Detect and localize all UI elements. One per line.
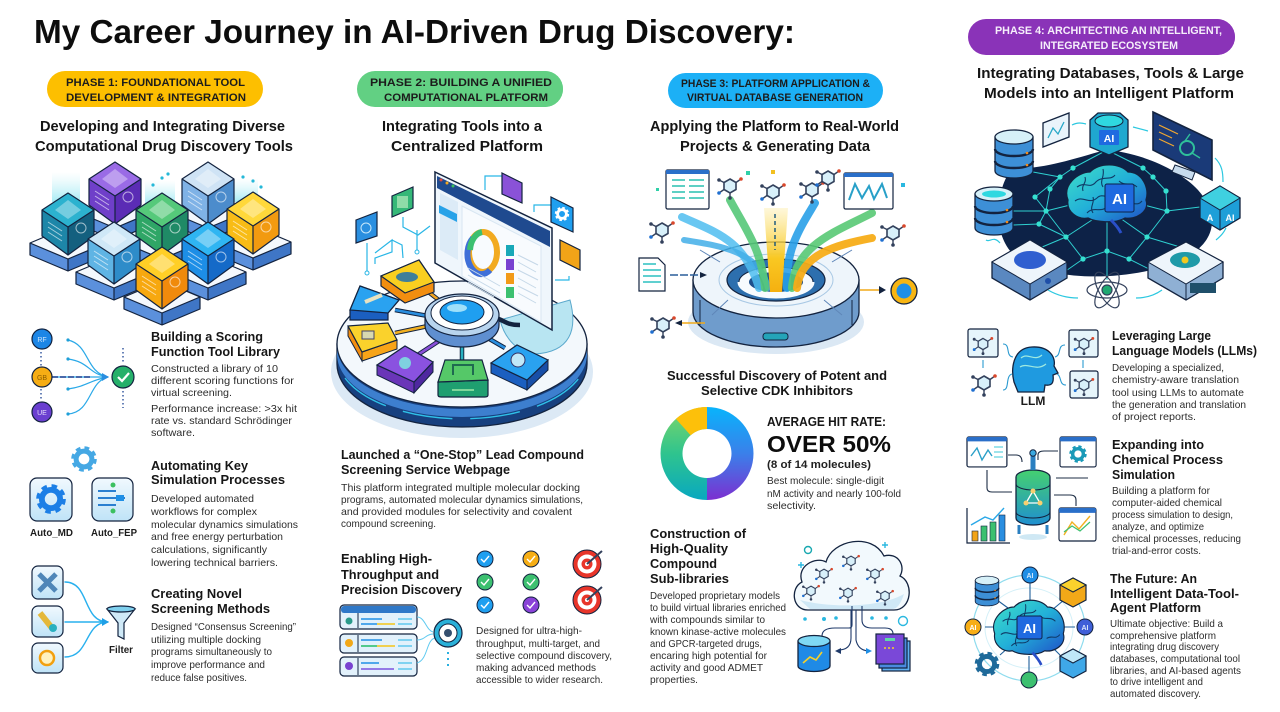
text: data-tool-agent platform: to drive intelligent and xyxy=(1110,677,1203,688)
phase 4 heading xyxy=(977,66,1244,102)
illustration: data funnel platform xyxy=(639,169,917,354)
text: average hit rate: OVER 50% xyxy=(767,431,891,457)
phase 3 heading: Applying the Platform to Real-World xyxy=(650,119,899,135)
phase 2 pill: PHASE 2: BUILDING A UNIFIED xyxy=(370,77,552,89)
text: data-tool-agent platform: automated discovery. xyxy=(1110,689,1201,700)
heading: CDK inhibitors: Successful Discovery of Potent and xyxy=(667,368,887,383)
text: chemical process simulation: analyze, and optimize xyxy=(1112,522,1204,533)
text: one-stop screening webpage: and provided modules for selectivity and covalent xyxy=(341,507,572,518)
icon: docking tiles into filter: Filter xyxy=(109,644,133,656)
text: automating simulations: Automating Key xyxy=(151,458,249,473)
text: compound sub-libraries: with compounds similar to xyxy=(649,615,765,626)
block: novel screening methods xyxy=(32,566,296,684)
text: scoring function library: software. xyxy=(151,428,195,439)
phase 1 pill: PHASE 1: FOUNDATIONAL TOOL xyxy=(66,77,245,89)
text: scoring function library: Constructed a library of 10 xyxy=(151,364,278,375)
heading: CDK inhibitors: Selective CDK Inhibitors xyxy=(701,383,853,398)
text: high-throughput body: making advanced methods xyxy=(476,663,596,674)
icon: docking tiles into filter xyxy=(32,566,135,673)
phase 2 pill: COMPUTATIONAL PLATFORM xyxy=(384,92,548,104)
text: compound sub-libraries: activity and good ADMET xyxy=(650,663,763,674)
donut chart: hit rate xyxy=(660,407,753,500)
text: novel screening methods xyxy=(151,586,296,684)
phase 2 heading: Integrating Tools into a xyxy=(382,119,543,135)
panel: phase 2 xyxy=(331,71,612,686)
illustration: isometric tool cubes xyxy=(30,162,291,325)
text: compound sub-libraries: Developed proprietary models xyxy=(650,591,780,602)
text: compound sub-libraries: known kinase-active molecules xyxy=(650,627,786,638)
text: data-tool-agent platform xyxy=(1110,571,1241,700)
icon: molecule cloud to database xyxy=(794,541,910,672)
text: scoring function library: Performance increase: >3x hit xyxy=(151,404,297,415)
AI brain xyxy=(1067,165,1147,233)
text: high-throughput body: accessible to wider research. xyxy=(476,675,603,686)
block: high-throughput discovery xyxy=(340,550,612,686)
phase 2 heading: Centralized Platform xyxy=(391,139,543,155)
text: automating simulations: Developed automated xyxy=(151,494,254,505)
AI cube xyxy=(1200,186,1240,230)
text: one-stop screening webpage: compound screening. xyxy=(341,519,436,530)
text: high-throughput body xyxy=(476,626,612,686)
network xyxy=(1013,150,1200,280)
phase 1 heading: Developing and Integrating Diverse xyxy=(40,119,285,135)
phase 4 pill: INTEGRATED ECOSYSTEM xyxy=(1040,40,1178,52)
text: average hit rate: nM activity and nearly 100-fold xyxy=(767,489,901,500)
text: scoring function library: rate vs. standard Schrödinger xyxy=(151,416,293,427)
modules xyxy=(348,260,548,397)
text: chemical process simulation: Building a platform for xyxy=(1112,486,1211,497)
text: LLMs: Leveraging Large xyxy=(1112,328,1211,343)
text: chemical process simulation: Expanding into xyxy=(1112,437,1204,452)
text: data-tool-agent platform: comprehensive platform xyxy=(1110,631,1216,642)
block: data-tool-agent platform xyxy=(965,567,1241,700)
text: LLMs: Developing a specialized, xyxy=(1112,363,1224,374)
icon: AI brain hub: AI xyxy=(1023,621,1036,636)
AI brain: AI xyxy=(1112,191,1127,208)
text: automating simulations: molecular dynamics simulations xyxy=(151,520,298,531)
text: data-tool-agent platform: Intelligent Data-Tool- xyxy=(1110,586,1239,601)
text: scoring function library: different scoring functions for xyxy=(151,376,295,387)
block: compound sub-libraries xyxy=(649,526,910,686)
phase 4 heading: Models into an Intelligent Platform xyxy=(984,86,1234,102)
text: novel screening methods: utilizing multiple docking xyxy=(151,635,261,646)
text: average hit rate: Best molecule: single-digit xyxy=(767,476,884,487)
phase 1 pill: DEVELOPMENT & INTEGRATION xyxy=(66,92,246,104)
illustration: intelligent network platform xyxy=(975,112,1240,311)
icon: gear and auto tiles: Auto_FEP xyxy=(91,527,137,539)
text: scoring function library: Building a Scoring xyxy=(151,329,263,344)
icon: scoring function flow: RF xyxy=(37,337,47,344)
text: novel screening methods: Screening Methods xyxy=(151,601,270,616)
AI cylinder: AI xyxy=(1104,133,1114,145)
phase 3 pill xyxy=(668,73,883,108)
phase 3 pill: PHASE 3: PLATFORM APPLICATION & xyxy=(681,78,870,90)
icon: scoring function flow: GB xyxy=(37,375,47,382)
icon: LLM head with molecules xyxy=(968,329,1098,408)
icon: AI brain hub: AI xyxy=(970,625,977,632)
text: chemical process simulation xyxy=(1112,437,1241,557)
heading: high-throughput: Enabling High- xyxy=(341,551,432,566)
text: data-tool-agent platform: Agent Platform xyxy=(1110,600,1201,615)
text: average hit rate xyxy=(767,415,901,512)
phase 3 heading: Projects & Generating Data xyxy=(680,139,871,155)
text: automating simulations: calculations, significantly xyxy=(151,545,268,556)
text: compound sub-libraries: Compound xyxy=(650,556,717,571)
monitor xyxy=(435,172,552,330)
phase 3 pill: VIRTUAL DATABASE GENERATION xyxy=(687,92,863,104)
text: compound sub-libraries: encaring high potential for xyxy=(650,651,768,662)
phase 1 heading: Computational Drug Discovery Tools xyxy=(35,139,293,155)
text: compound sub-libraries xyxy=(649,526,786,686)
text: LLMs: the generation and translation xyxy=(1112,400,1246,411)
icon: reactor with charts xyxy=(967,437,1096,543)
text: novel screening methods: Designed “Consensus Screening” xyxy=(151,622,296,633)
text: compound sub-libraries: and GPCR-targeted drugs, xyxy=(650,639,762,650)
text: high-throughput body: selective compound discovery, xyxy=(476,651,612,662)
heading: high-throughput: Precision Discovery xyxy=(341,582,463,597)
text: chemical process simulation: Simulation xyxy=(1112,467,1175,482)
text: compound sub-libraries: High-Quality xyxy=(650,541,729,556)
text: chemical process simulation: Chemical Process xyxy=(1112,452,1223,467)
icon: screening list to target xyxy=(340,605,462,676)
text: one-stop screening webpage: programs, automated molecular dynamics simulations, xyxy=(341,495,583,506)
atom xyxy=(1087,269,1127,311)
server boxes xyxy=(992,240,1223,300)
connectors xyxy=(395,287,520,362)
panel: phase 4 xyxy=(965,19,1257,700)
text: novel screening methods: reduce false positives. xyxy=(151,673,247,684)
chart panel xyxy=(1043,113,1069,147)
text: data-tool-agent platform: libraries, and AI-based agents xyxy=(1110,666,1241,677)
icon: gear and auto tiles xyxy=(30,449,137,539)
floating tool tiles xyxy=(356,173,580,280)
text: scoring function library: Function Tool Library xyxy=(151,344,281,359)
text: one-stop screening webpage: Screening Service Webpage xyxy=(341,462,510,477)
phase 1 heading xyxy=(35,119,293,155)
block: chemical process simulation xyxy=(967,437,1241,557)
text: LLMs xyxy=(1112,328,1257,423)
icon: scoring function flow: UE xyxy=(37,410,47,417)
text: automating simulations: lowering technical barriers. xyxy=(151,558,278,569)
phase 3 heading xyxy=(650,119,899,155)
text: novel screening methods: Creating Novel xyxy=(151,586,242,601)
text: automating simulations: Simulation Processes xyxy=(151,472,285,487)
text: automating simulations xyxy=(150,458,298,569)
heading: high-throughput xyxy=(341,551,463,597)
text: novel screening methods: improve performance and xyxy=(151,660,265,671)
phase 2 heading xyxy=(382,119,543,155)
text: novel screening methods: programs simultaneously to xyxy=(151,647,272,658)
text: automating simulations: and free energy perturbation xyxy=(151,532,283,543)
source windows and molecules xyxy=(639,169,917,339)
text: compound sub-libraries: to build virtual libraries enriched xyxy=(650,603,786,614)
text: compound sub-libraries: Sub-libraries xyxy=(650,571,729,586)
panel: phase 1 xyxy=(30,71,298,684)
heading: high-throughput: Throughput and xyxy=(341,567,439,582)
block: automating simulations xyxy=(30,449,298,569)
title: My Career Journey in AI-Driven Drug Discovery: xyxy=(34,14,795,51)
text: average hit rate: (8 of 14 molecules) xyxy=(767,459,871,471)
phase 4 pill: PHASE 4: ARCHITECTING AN INTELLIGENT, xyxy=(995,25,1222,37)
icon: gear and auto tiles: Auto_MD xyxy=(30,527,73,539)
text: chemical process simulation: trial-and-error costs. xyxy=(1112,546,1201,557)
icon: AI brain hub xyxy=(965,567,1093,688)
text: average hit rate: AVERAGE HIT RATE: xyxy=(767,415,886,429)
phase 4 pill xyxy=(968,19,1235,55)
text: LLMs: tool using LLMs to automate xyxy=(1112,388,1244,399)
text: LLMs: of project reports. xyxy=(1112,412,1196,423)
text: chemical process simulation: process simulation to design, xyxy=(1112,510,1233,521)
text: one-stop screening webpage: Launched a “One-Stop” Lead Compound xyxy=(341,447,584,462)
text: data-tool-agent platform: The Future: An xyxy=(1110,571,1197,586)
text: chemical process simulation: chemical processes, reducing xyxy=(1112,534,1241,545)
icon: AI brain hub: AI xyxy=(1026,573,1034,580)
icon: LLM head with molecules: LLM xyxy=(1021,394,1045,408)
block: LLMs xyxy=(968,328,1257,423)
text: compound sub-libraries: Construction of xyxy=(650,526,747,541)
text: chemical process simulation: computer-aided chemical xyxy=(1112,498,1222,509)
text: one-stop screening webpage xyxy=(341,447,584,530)
databases xyxy=(975,130,1033,235)
icon: check badges and targets xyxy=(477,550,602,614)
text: scoring function library xyxy=(151,329,297,439)
text: compound sub-libraries: properties. xyxy=(650,675,698,686)
text: scoring function library: virtual screening. xyxy=(151,388,232,399)
text: automating simulations: workflows for complex xyxy=(150,507,257,518)
illustration: centralized platform disc xyxy=(331,172,593,438)
text: one-stop screening webpage: This platform integrated multiple molecular docking xyxy=(341,483,580,494)
icon: AI brain hub: AI xyxy=(1082,625,1089,632)
data streams xyxy=(682,200,872,288)
AI cylinder xyxy=(1090,113,1128,155)
phase 1 pill xyxy=(47,71,263,107)
text: data-tool-agent platform: databases, computational tool xyxy=(1110,654,1240,665)
text: data-tool-agent platform: integrating drug discovery xyxy=(1110,642,1220,653)
block: scoring function library xyxy=(32,329,297,439)
code monitor xyxy=(1153,112,1212,180)
text: high-throughput body: throughput, multi-target, and xyxy=(476,639,600,650)
text: average hit rate: selectivity. xyxy=(767,501,816,512)
heading: CDK inhibitors xyxy=(667,368,887,398)
AI cube: A xyxy=(1207,213,1214,223)
text: high-throughput body: Designed for ultra-high- xyxy=(476,626,582,637)
AI cube: AI xyxy=(1226,213,1234,223)
panel: phase 3 xyxy=(639,73,917,686)
text: LLMs: Language Models (LLMs) xyxy=(1112,343,1257,358)
hub xyxy=(425,294,499,347)
phase 4 heading: Integrating Databases, Tools & Large xyxy=(977,66,1244,82)
icon: scoring function flow xyxy=(32,329,134,422)
text: LLMs: chemistry-aware translation xyxy=(1112,375,1239,386)
text: data-tool-agent platform: Ultimate objective: Build a xyxy=(1110,619,1223,630)
phase 2 pill xyxy=(357,71,563,107)
